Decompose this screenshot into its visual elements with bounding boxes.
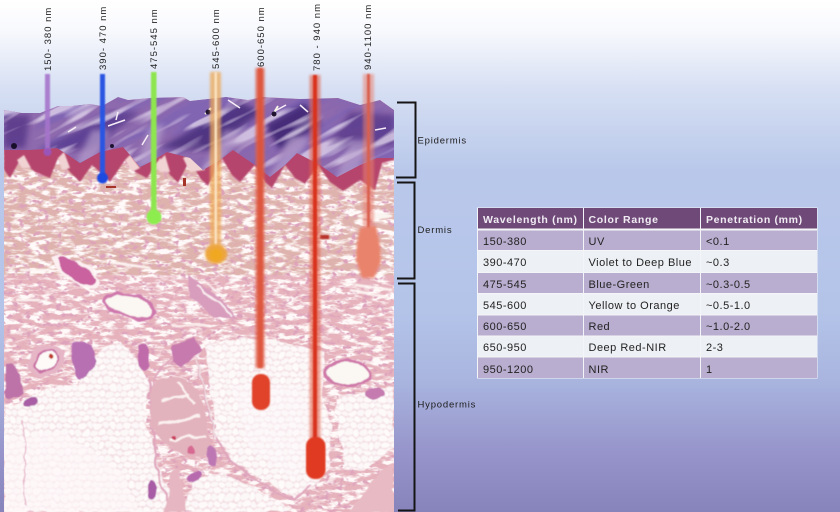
row: 950-1200 [483, 364, 713, 376]
label: Dermis: Dermis [418, 225, 452, 236]
row: 390-470: 390-470 [483, 257, 527, 269]
row: 390-470: Violet to Deep Blue [588, 257, 692, 269]
icon: beam 940-1100 nm NIR [356, 74, 381, 278]
table header: Wavelength (nm) [483, 214, 578, 226]
row: 475-545: Blue-Green [588, 279, 650, 291]
label: 940-1100 nm: 940-1100 nm [363, 4, 374, 70]
row: 650-950: 2-3 [706, 342, 723, 354]
dermis details [16, 178, 393, 300]
row: 390-470: ~0.3 [706, 257, 730, 269]
row: 545-600: Yellow to Orange [588, 300, 680, 312]
table header: Color Range [588, 214, 659, 226]
label: Hypodermis: Hypodermis [418, 400, 476, 410]
row: 150-380 [483, 236, 730, 248]
label: Epidermis: Epidermis [418, 136, 467, 146]
icon: beam 780-940 nm deep red-NIR [306, 75, 326, 479]
row: 475-545: ~0.3-0.5 [706, 279, 751, 291]
icon: beam 600-650 nm red [252, 68, 270, 410]
table header [483, 214, 803, 226]
row: 600-650 [483, 321, 751, 333]
table header: Penetration (mm) [706, 214, 803, 226]
row: 150-380: UV [588, 236, 605, 248]
label: 390-470 nm: 390- 470 nm [98, 6, 109, 70]
vessel and glands [52, 255, 100, 288]
wavelength labels [43, 3, 374, 71]
label: 475-545 nm: 475-545 nm [149, 8, 160, 69]
bracket: hypodermis [398, 284, 414, 510]
row: 650-950 [483, 342, 723, 354]
row: 950-1200: NIR [588, 364, 609, 376]
label: 150-380 nm: 150- 380 nm [43, 7, 54, 71]
row: 545-600 [483, 300, 751, 312]
rete ridges [4, 145, 394, 191]
row: 475-545: 475-545 [483, 279, 527, 291]
row: 545-600: 545-600 [483, 300, 527, 312]
icon: beam 475-545 nm blue-green [146, 72, 162, 224]
table frame and rows [477, 208, 818, 378]
row: 150-380: 150-380 [483, 236, 527, 248]
row: 545-600: ~0.5-1.0 [706, 300, 751, 312]
bracket: dermis [397, 182, 414, 278]
icon: beam 150-380 nm UV [44, 74, 52, 156]
icon: beam 545-600 nm yellow to orange [205, 72, 227, 264]
row: 600-650: Red [588, 321, 610, 333]
panel: skin cross-section [4, 97, 394, 512]
row: 650-950: 650-950 [483, 342, 527, 354]
dermal papillae [17, 152, 205, 172]
dermis texture [4, 97, 394, 512]
label: 545-600 nm: 545-600 nm [211, 8, 222, 69]
label: 780-940 nm: 780 - 940 nm [312, 3, 323, 71]
central connective tissue [150, 376, 209, 457]
row: 650-950: Deep Red-NIR [588, 342, 667, 354]
row: 150-380: <0.1 [706, 236, 730, 248]
row: 600-650: ~1.0-2.0 [706, 321, 751, 333]
row: 475-545 [483, 279, 751, 291]
row: 390-470 [483, 257, 730, 269]
row: 950-1200: 950-1200 [483, 364, 534, 376]
hypodermis fat and glands [4, 255, 394, 512]
icon: beam 390-470 nm violet to deep blue [97, 74, 108, 184]
table: wavelength, color range, penetration [477, 208, 818, 378]
epidermis [4, 97, 394, 177]
bracket: epidermis [396, 102, 416, 178]
label: 600-650 nm: 600-650 nm [256, 6, 267, 67]
row: 600-650: 600-650 [483, 321, 527, 333]
connective septa [20, 357, 312, 506]
row: 950-1200: 1 [706, 364, 713, 376]
fat lobules [4, 342, 178, 512]
